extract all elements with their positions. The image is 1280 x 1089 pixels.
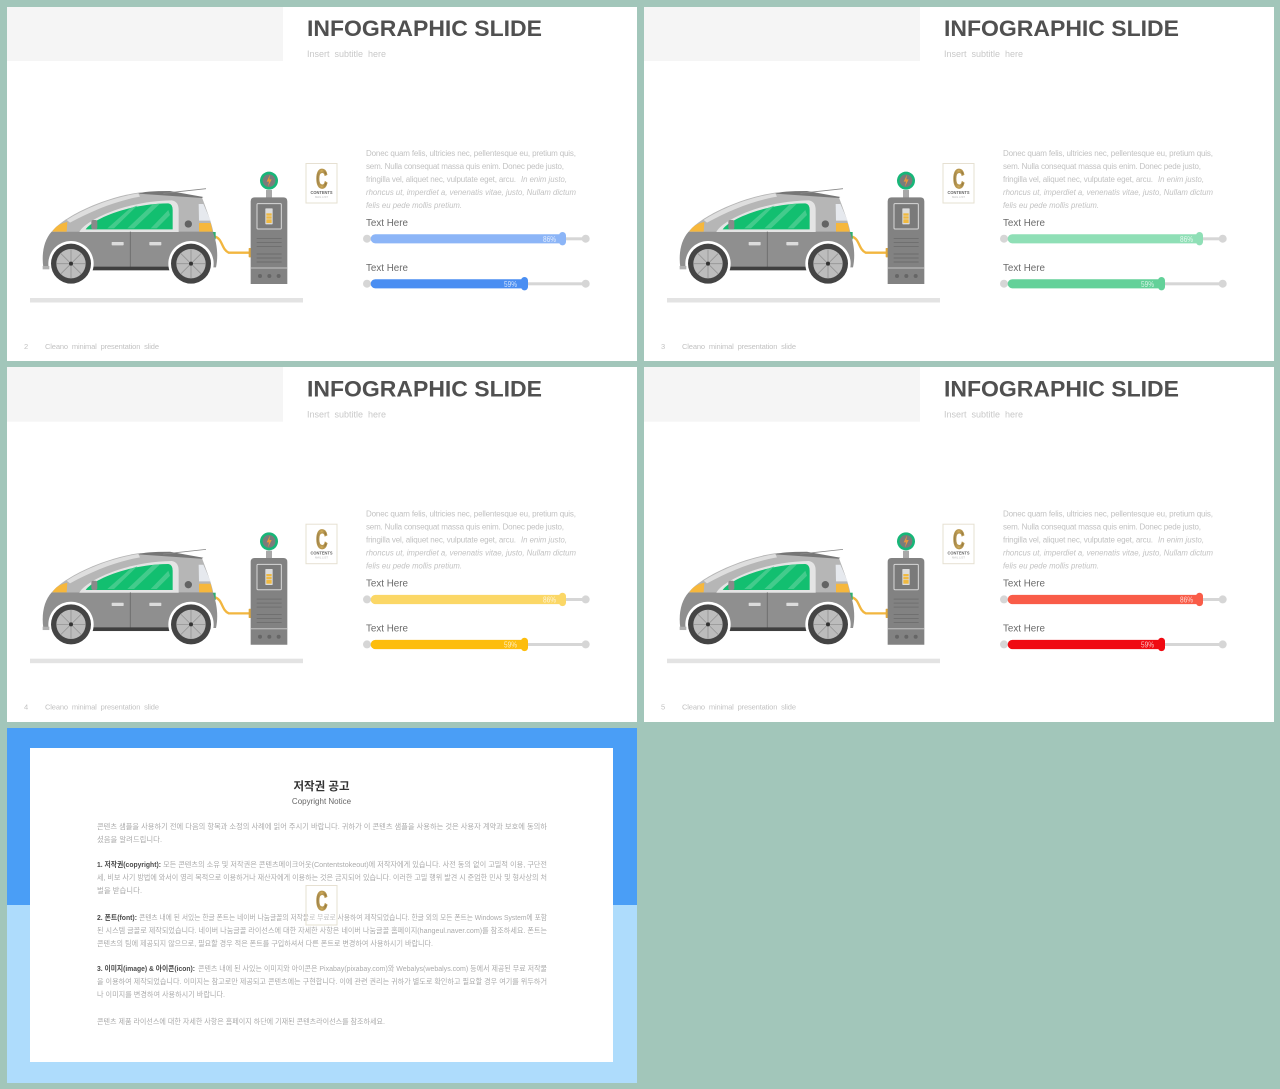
footer: Cleano minimal presentation slide — [45, 342, 159, 351]
ground line — [30, 298, 303, 302]
text block: fringilla vel, aliquet nec, vulputate eget, arcu. — [1003, 175, 1153, 184]
text block: sem. Nulla consequat massa quis enim. Donec pede justo, — [366, 162, 564, 171]
section 1: copyright: 세, 비보 사기 방법에 와서이 영리 목적으로 이용하거나 재산자에게 이용하는 것은 금지되어 있습니다. 이러한 고밀 행위 발견 시 준엄한 민사 및 형사상의 처 — [97, 872, 547, 882]
logo — [943, 164, 974, 203]
section 2: font — [97, 912, 547, 948]
logo: CONTENTS — [948, 190, 970, 195]
section 2: font: 된 시스템 글꼴로 제작되었습니다. 네이버 나눔글꼴 라이선스에 대한 자세한 사항은 네이버 나눔글꼴 홈페이지(hangeul.naver.com)를 참조하세요. 폰트는 — [97, 925, 547, 935]
illustration: electric car charging — [43, 172, 287, 286]
text block: sem. Nulla consequat massa quis enim. Donec pede justo, — [366, 523, 564, 532]
progress bar 2: 59% — [1141, 641, 1154, 650]
footer: 5 — [661, 703, 665, 712]
logo watermark: C — [316, 886, 328, 916]
progress bar 1 — [1000, 217, 1227, 245]
progress bar 1: 86% — [1180, 596, 1193, 605]
intro text: 콘텐츠 샘플을 사용하기 전에 다음의 항목과 소정의 사례에 읽어 주시기 바랍니다. 귀하가 이 콘텐츠 샘플을 사용하는 것은 사용자 계약과 보호에 동의하 — [97, 821, 547, 831]
subtitle: Insert subtitle here — [307, 410, 386, 420]
panel: slide 5 red — [644, 367, 1274, 722]
text block: Donec quam felis, ultricies nec, pellentesque eu, pretium quis, — [1003, 510, 1213, 519]
footer: 4 — [24, 703, 28, 712]
footer: 3 — [661, 342, 665, 351]
section 3: image and icon: 나 이미지를 변경하여 사용하시기 바랍니다. — [97, 989, 225, 999]
progress bar 1: Text Here — [366, 217, 408, 229]
logo — [306, 524, 337, 564]
logo: CONTENTS — [948, 551, 970, 556]
logo: C — [316, 525, 328, 555]
intro text — [97, 821, 547, 844]
progress bar 1: 86% — [1180, 235, 1193, 244]
section 3: image and icon: 콘텐츠 내에 된 사있는 이미지와 아이콘은 Pixabay(pixabay.com)와 Webalys(webalys.com) 등에서 제공된 무료 저작물 — [198, 963, 547, 973]
ground line — [667, 659, 940, 663]
progress bar 1: 86% — [543, 596, 556, 605]
text block: In enim justo, — [1158, 175, 1204, 184]
progress bar 2: Text Here — [366, 623, 408, 635]
section 1: copyright: 1. 저작권(copyright): — [97, 859, 161, 869]
logo: CONTENTS — [310, 551, 332, 556]
illustration: electric car charging — [680, 532, 924, 647]
section 3: image and icon: 3. 이미지(image) & 아이콘(icon): — [97, 963, 195, 973]
section 1: copyright: 벌을 받습니다. — [97, 885, 142, 895]
footer: Cleano minimal presentation slide — [682, 342, 796, 351]
section 3: image and icon: 을 이용하여 제작되었습니다. 이미지는 참고로만 제공되고 콘텐츠에는 구현합니다. 이에 관련 권리는 귀하가 별도로 확인하고 필요할 경우 여기를 위두하거 — [97, 976, 547, 986]
ground line — [667, 298, 940, 302]
section 1: copyright — [97, 859, 547, 895]
progress bar 2: Text Here — [1003, 623, 1045, 635]
panel: copyright notice — [7, 728, 637, 1083]
progress bar 2: 59% — [1141, 280, 1154, 289]
panel: slide 3 green — [644, 7, 1274, 361]
progress bar 1 — [363, 578, 590, 606]
text block: fringilla vel, aliquet nec, vulputate eget, arcu. — [1003, 536, 1153, 545]
text block: felis eu pede mollis pretium. — [1003, 562, 1099, 571]
progress bar 2 — [363, 623, 590, 651]
footer: Cleano minimal presentation slide — [682, 703, 796, 712]
progress bar 1 — [363, 217, 590, 245]
logo: C — [953, 525, 964, 555]
text block: felis eu pede mollis pretium. — [366, 201, 462, 210]
section 1: copyright: 모든 콘텐츠의 소유 및 저작권은 콘텐츠메이크어웃(Contentstokeout)에 저작자에게 있습니다. 사전 동의 없이 고밀적 이용, 구단전 — [163, 859, 547, 869]
text block: In enim justo, — [1158, 536, 1204, 545]
footer: 2 — [24, 342, 28, 351]
logo: MAIL LIST — [952, 195, 965, 199]
progress bar 2 — [363, 262, 590, 290]
intro text: 셨음을 알려드립니다. — [97, 834, 162, 844]
subtitle: Insert subtitle here — [944, 410, 1023, 420]
text block: Donec quam felis, ultricies nec, pellentesque eu, pretium quis, — [366, 510, 576, 519]
text block: rhoncus ut, imperdiet a, venenatis vitae, justo, Nullam dictum — [366, 188, 576, 197]
progress bar 2: Text Here — [366, 262, 408, 274]
text block: felis eu pede mollis pretium. — [366, 562, 462, 571]
illustration: electric car charging — [680, 172, 924, 286]
text block: rhoncus ut, imperdiet a, venenatis vitae, justo, Nullam dictum — [1003, 549, 1213, 558]
text block — [1003, 149, 1213, 210]
subtitle: Insert subtitle here — [307, 49, 386, 59]
progress bar 2: Text Here — [1003, 262, 1045, 274]
progress bar 1: Text Here — [366, 578, 408, 590]
panel: slide 4 yellow — [7, 367, 637, 722]
logo: C — [316, 164, 328, 194]
title: INFOGRAPHIC SLIDE — [307, 377, 542, 402]
subtitle: Insert subtitle here — [944, 49, 1023, 59]
text block: fringilla vel, aliquet nec, vulputate eget, arcu. — [366, 175, 516, 184]
text block: In enim justo, — [521, 175, 567, 184]
progress bar 2: 59% — [504, 641, 517, 650]
text block: In enim justo, — [521, 536, 567, 545]
text block — [366, 510, 576, 571]
logo: MAIL LIST — [315, 556, 328, 560]
progress bar 2 — [1000, 623, 1227, 651]
logo: MAIL LIST — [952, 556, 965, 560]
progress bar 1: Text Here — [1003, 217, 1045, 229]
section 2: font: 2. 폰트(font): — [97, 913, 137, 922]
text block — [366, 149, 576, 210]
footer: Cleano minimal presentation slide — [45, 703, 159, 712]
title: INFOGRAPHIC SLIDE — [944, 377, 1179, 402]
illustration: electric car charging — [43, 532, 287, 647]
section 3: image and icon — [97, 963, 547, 999]
progress bar 1 — [1000, 578, 1227, 606]
logo — [943, 524, 974, 564]
progress bar 1: Text Here — [1003, 578, 1045, 590]
section 2: font: 콘텐츠의 팀에 제공되지 않으므로, 필요할 경우 적은 폰트를 구입하셔서 다른 폰트로 변경하여 사용하시기 바랍니다. — [97, 938, 433, 948]
text block: felis eu pede mollis pretium. — [1003, 201, 1099, 210]
text block: rhoncus ut, imperdiet a, venenatis vitae, justo, Nullam dictum — [1003, 188, 1213, 197]
text block: rhoncus ut, imperdiet a, venenatis vitae, justo, Nullam dictum — [366, 549, 576, 558]
progress bar 2 — [1000, 262, 1227, 290]
title: INFOGRAPHIC SLIDE — [307, 16, 542, 41]
text block: sem. Nulla consequat massa quis enim. Donec pede justo, — [1003, 162, 1201, 171]
logo watermark — [306, 886, 337, 925]
text block: fringilla vel, aliquet nec, vulputate eget, arcu. — [366, 536, 516, 545]
progress bar 2: 59% — [504, 280, 517, 289]
title: INFOGRAPHIC SLIDE — [944, 16, 1179, 41]
logo: C — [953, 164, 964, 194]
section 2: font: 콘텐츠 내에 된 서있는 한글 폰트는 네이버 나눔글꼴의 저작물로 무료로 사용하여 제작되었습니다. 한글 외의 모든 폰트는 Windows System에 포함 — [139, 912, 547, 922]
text block — [1003, 510, 1213, 571]
logo — [306, 164, 337, 203]
text block: sem. Nulla consequat massa quis enim. Donec pede justo, — [1003, 523, 1201, 532]
closing note: 콘텐츠 제품 라이선스에 대한 자세한 사항은 홈페이지 하단에 기재된 콘텐츠라이선스를 참조하세요. — [97, 1016, 385, 1026]
notice heading: 저작권 공고 — [293, 779, 350, 793]
notice subheading: Copyright Notice — [292, 797, 352, 806]
logo: MAIL LIST — [315, 195, 328, 199]
text block: Donec quam felis, ultricies nec, pellentesque eu, pretium quis, — [1003, 149, 1213, 158]
progress bar 1: 86% — [543, 235, 556, 244]
ground line — [30, 659, 303, 663]
text block: Donec quam felis, ultricies nec, pellentesque eu, pretium quis, — [366, 149, 576, 158]
logo: CONTENTS — [310, 190, 332, 195]
panel: slide 2 blue — [7, 7, 637, 361]
